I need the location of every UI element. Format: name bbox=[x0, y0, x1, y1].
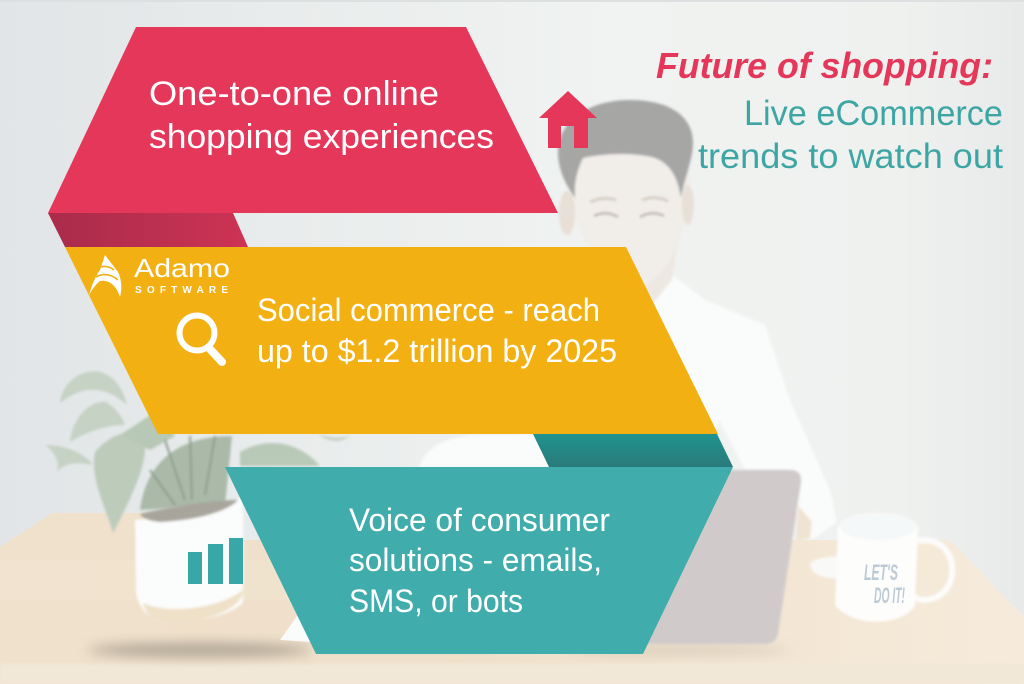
text: social commerce: up to $1.2 trillion by 2025 bbox=[257, 333, 617, 369]
text: voice of consumer: SMS, or bots bbox=[349, 583, 523, 619]
plant pot bbox=[135, 497, 243, 621]
text: social commerce: Social commerce - reach bbox=[257, 292, 600, 328]
icon: house bbox=[539, 91, 597, 148]
red fold shadow bbox=[48, 213, 248, 247]
yellow band bbox=[65, 247, 718, 434]
subtitle: Live eCommerce bbox=[744, 94, 1003, 133]
text: voice of consumer: solutions - emails, bbox=[349, 542, 602, 578]
panel: yellow social commerce bbox=[65, 247, 718, 434]
person bbox=[420, 100, 837, 541]
text: one-to-one: shopping experiences bbox=[149, 118, 494, 156]
mug: LET'S bbox=[864, 560, 898, 585]
teal fold shadow bbox=[533, 434, 733, 467]
panel: teal voice of consumer bbox=[225, 434, 733, 654]
plant bbox=[45, 371, 350, 533]
title bbox=[656, 45, 1003, 176]
logo: Adamo Software: Adamo bbox=[134, 253, 230, 283]
laptop bbox=[280, 470, 801, 644]
logo: Adamo Software bbox=[89, 253, 230, 297]
red band bbox=[48, 27, 558, 213]
subtitle: trends to watch out bbox=[698, 137, 1003, 176]
icon: bar chart bbox=[188, 538, 243, 584]
panel: red one-to-one shopping bbox=[48, 27, 558, 247]
text: voice of consumer: Voice of consumer bbox=[349, 502, 610, 538]
logo: Adamo Software: SOFTWARE bbox=[135, 285, 228, 296]
title line: future of shopping: Future of shopping: bbox=[656, 45, 993, 86]
text: one-to-one: One-to-one online bbox=[149, 75, 439, 113]
mug: DO IT! bbox=[874, 583, 905, 608]
mug bbox=[810, 513, 952, 622]
teal band bbox=[225, 467, 733, 654]
icon: magnifying glass bbox=[180, 316, 222, 362]
